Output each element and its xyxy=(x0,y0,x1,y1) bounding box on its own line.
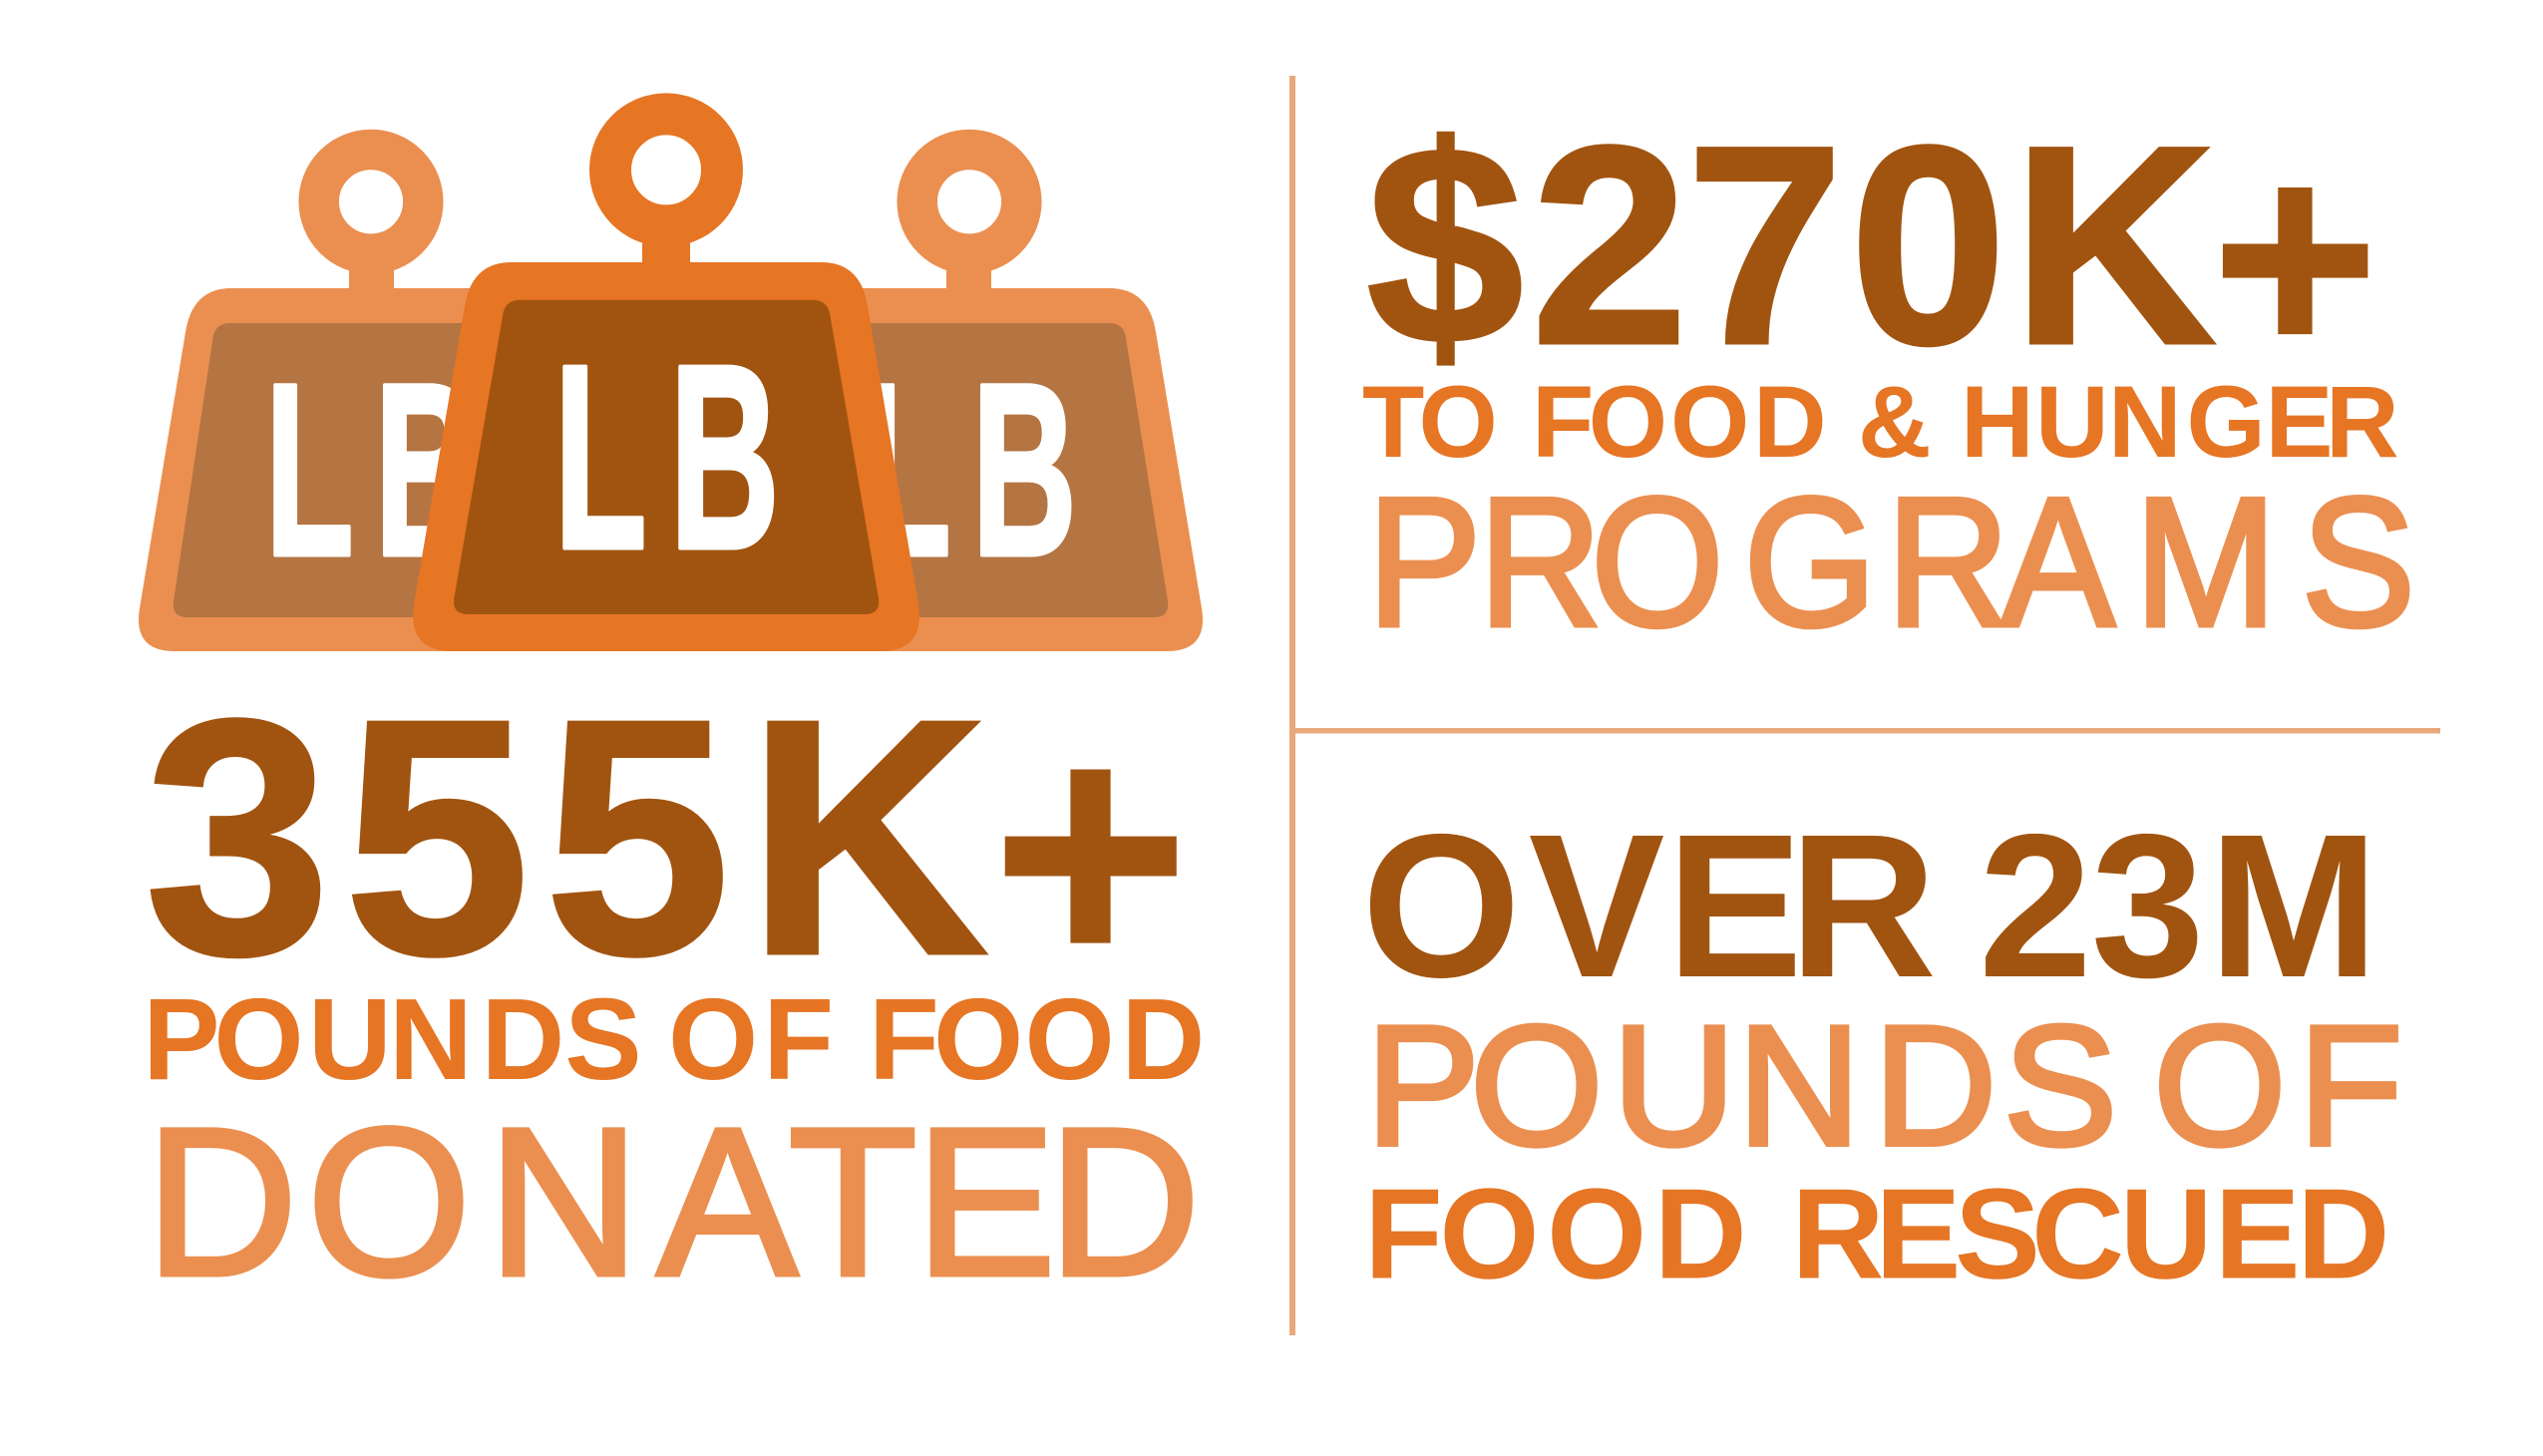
icon: three LB weights xyxy=(139,114,1203,651)
divider: vertical xyxy=(1289,76,1295,1335)
divider: horizontal xyxy=(1295,728,2440,734)
label: pounds of food: POUNDS OF FOOD xyxy=(143,974,1205,1104)
label: pounds of: POUNDS OF xyxy=(1366,991,2402,1181)
stat: over 23M: OVER 23M xyxy=(1362,792,2378,1020)
icon: right weight xyxy=(863,150,1077,606)
label: donated: DONATED xyxy=(146,1084,1200,1319)
icon: right weight: LB xyxy=(863,332,1077,606)
icon: left weight: LB xyxy=(265,332,480,606)
icon: center weight: LB xyxy=(554,309,780,603)
icon: center weight xyxy=(413,114,919,651)
stat: 355K+: 355K+ xyxy=(144,650,1189,1040)
stat: $270K+: $270K+ xyxy=(1366,88,2377,416)
icon: left weight xyxy=(139,150,1203,651)
label: food rescued: FOOD RESCUED xyxy=(1364,1163,2389,1306)
label: programs: PROGRAMS xyxy=(1367,459,2415,664)
label: to food and hunger: TO FOOD & HUNGER xyxy=(1362,365,2399,479)
